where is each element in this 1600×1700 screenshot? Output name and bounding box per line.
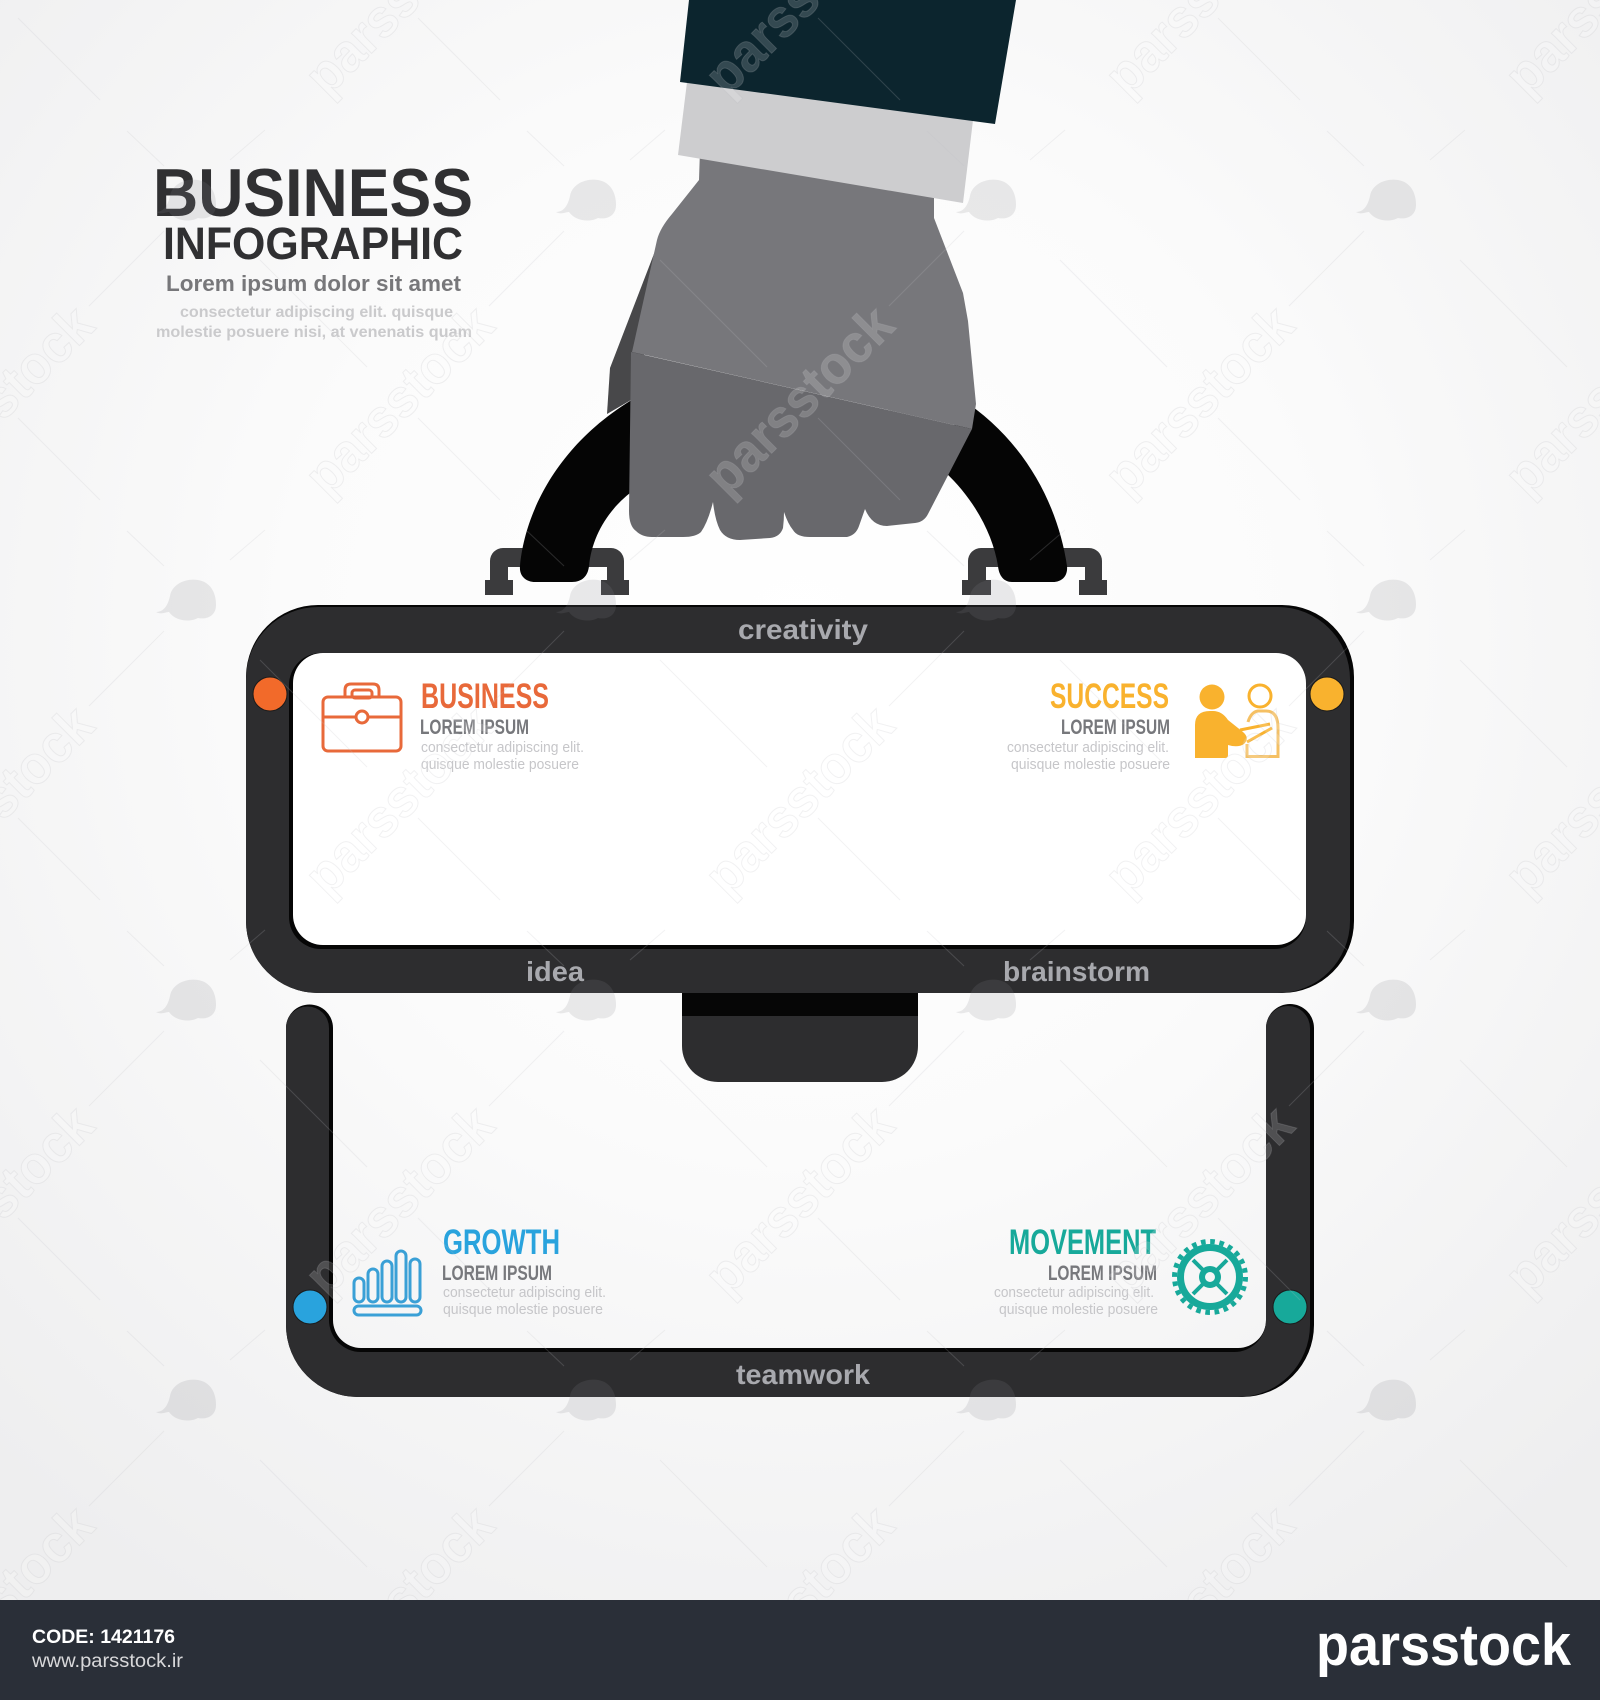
title block: Lorem ipsum dolor sit amet (166, 271, 462, 296)
watermark words: parsstock (693, 1094, 906, 1306)
text: movement block (994, 1223, 1158, 1318)
title block (153, 155, 473, 341)
bar labels (526, 614, 1150, 1390)
text: growth block (442, 1223, 606, 1318)
text: success block (1007, 677, 1170, 773)
status dot: blue (293, 1290, 327, 1324)
text: movement block: LOREM IPSUM (1048, 1262, 1157, 1285)
text: success block: SUCCESS (1050, 677, 1169, 716)
footer code: CODE: 1421176 (32, 1627, 175, 1648)
bar labels: teamwork (736, 1359, 870, 1390)
text: business block: BUSINESS (421, 677, 549, 716)
shirt cuff (678, 74, 974, 203)
icon: handshake (1195, 684, 1278, 758)
title block: BUSINESS (153, 155, 473, 231)
text: movement block: quisque molestie posuere (999, 1302, 1158, 1318)
watermark words: parsstock (1093, 1094, 1306, 1306)
panel: upper case frame (246, 605, 1354, 993)
watermark words: parsstock (293, 1494, 506, 1700)
text: business block: LOREM IPSUM (420, 716, 529, 739)
watermark words: parsstock (693, 694, 906, 906)
text: growth block: quisque molestie posuere (443, 1302, 603, 1318)
text: business block: consectetur adipiscing elit. (421, 740, 584, 756)
footer url: www.parsstock.ir (31, 1651, 184, 1672)
panel: lower case frame (286, 1004, 1314, 1397)
bar labels: creativity (738, 614, 868, 645)
watermark words: parsstock (293, 1094, 506, 1306)
footer logo: parsstock (1316, 1613, 1572, 1678)
title block: molestie posuere nisi, at venenatis quam (156, 324, 472, 341)
footer bar (0, 1600, 1600, 1700)
watermark words: parsstock (293, 294, 506, 506)
title block: INFOGRAPHIC (163, 218, 463, 269)
text: movement block: MOVEMENT (1009, 1223, 1156, 1262)
text: business block (420, 677, 584, 773)
status dot: teal (1273, 1290, 1307, 1324)
title block: consectetur adipiscing elit. quisque (180, 304, 453, 321)
watermark words: parsstock (1093, 294, 1306, 506)
case clasp (682, 993, 918, 1082)
text: success block: consectetur adipiscing elit. (1007, 740, 1169, 756)
handle brackets (485, 548, 1107, 595)
icon: gear (1174, 1242, 1246, 1312)
watermark words: parsstock (293, 694, 506, 906)
fist (607, 150, 976, 540)
watermark words: parsstock (1093, 1494, 1306, 1700)
text: growth block: LOREM IPSUM (442, 1262, 552, 1285)
text: growth block: GROWTH (443, 1223, 560, 1262)
sleeve (680, 0, 1016, 124)
watermark words: parsstock (1093, 694, 1306, 906)
bar labels: idea (526, 956, 584, 987)
briefcase handle arcs (520, 395, 1067, 582)
text: movement block: consectetur adipiscing elit. (994, 1285, 1154, 1301)
text: success block: LOREM IPSUM (1061, 716, 1170, 739)
icon: bar chart (354, 1251, 421, 1315)
icon: briefcase (323, 684, 401, 751)
watermark words: parsstock (693, 294, 906, 506)
text: business block: quisque molestie posuere (421, 757, 579, 773)
bar labels: brainstorm (1003, 956, 1150, 987)
status dot: yellow (1310, 677, 1344, 711)
text: success block: quisque molestie posuere (1011, 757, 1170, 773)
status dot: orange (253, 677, 287, 711)
text: growth block: consectetur adipiscing elit. (443, 1285, 606, 1301)
watermark words: parsstock (693, 1494, 906, 1700)
